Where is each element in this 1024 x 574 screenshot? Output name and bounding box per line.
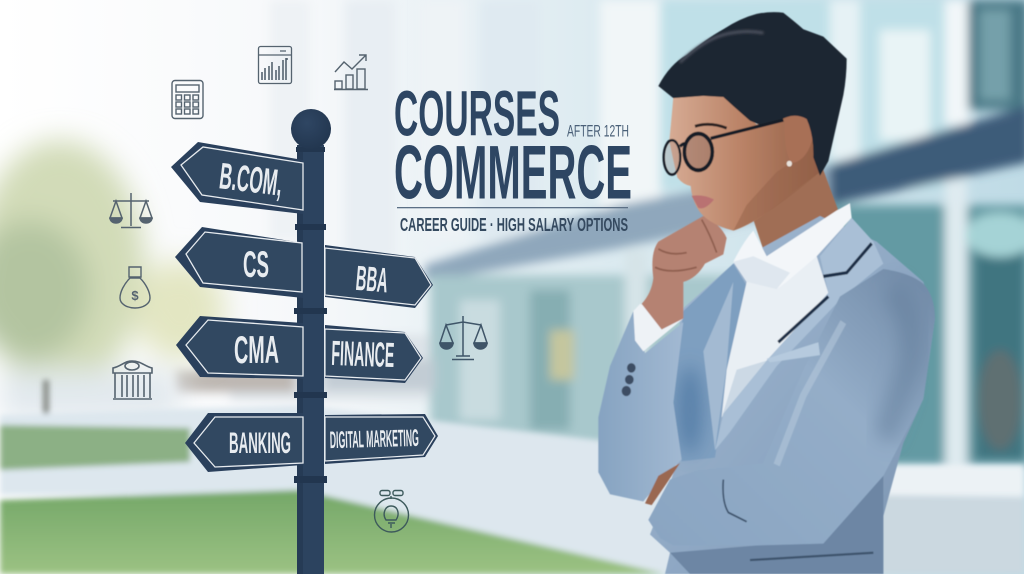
right shoulder and sleeve [648,269,935,545]
tagline: CAREER GUIDE · HIGH SALARY OPTIONS [400,215,628,235]
white shirt [722,256,828,417]
sign: CS [175,227,303,298]
text: DIGITAL MARKETING [329,425,419,454]
divider line [397,207,628,208]
title block [394,78,632,235]
left jacket panel [673,264,747,461]
tucked hand [645,463,680,505]
blazer torso [650,216,935,574]
sign: B.COM [171,142,303,214]
icon: money bag: $ [131,288,139,303]
icon: calculator [172,80,203,118]
icon: money bag [120,267,150,308]
neck [753,161,838,260]
sleeve buttons [622,363,636,396]
hair [658,12,847,176]
icon: stopwatch with idea bulb [374,490,408,532]
sign: BBA: BBA [354,259,390,300]
breast pocket [767,342,820,362]
sign: FINANCE: FINANCE [331,334,395,375]
cuff [633,304,683,351]
face [669,95,823,231]
heading: COURSES: COURSES [394,78,560,150]
sign: FINANCE [325,325,423,383]
person: thinking student in blazer [598,12,935,574]
sign: BANKING: BANKING [229,427,291,460]
subheading: AFTER 12TH: AFTER 12TH [567,122,629,140]
sign: DIGITAL MARKETING [325,414,438,464]
sign: B.COM: B.COM, [217,155,285,204]
lower jacket shadow [670,476,883,574]
left forearm sleeve [598,311,683,502]
sign: BBA [325,245,433,308]
sign: BANKING [185,413,303,472]
sign: CMA: CMA [234,329,279,372]
hand on chin [642,216,727,329]
signpost [171,109,438,574]
icon: growth chart [334,55,368,90]
post pole [291,109,331,574]
icon: bank building [113,361,152,399]
ear [785,116,813,163]
shirt collar [733,203,852,289]
lips [692,195,714,208]
sign: CMA [176,316,303,379]
icon: report chart panel [258,46,292,84]
glasses [664,120,783,175]
icon: scales right [440,316,487,360]
heading: COMMERCE: COMMERCE [394,130,632,216]
eyebrow [695,124,727,128]
earring [787,161,792,167]
icon: scales left [110,193,152,228]
sign: CS: CS [243,244,269,285]
right lapel [715,218,883,450]
shadow on jaw [733,146,820,231]
